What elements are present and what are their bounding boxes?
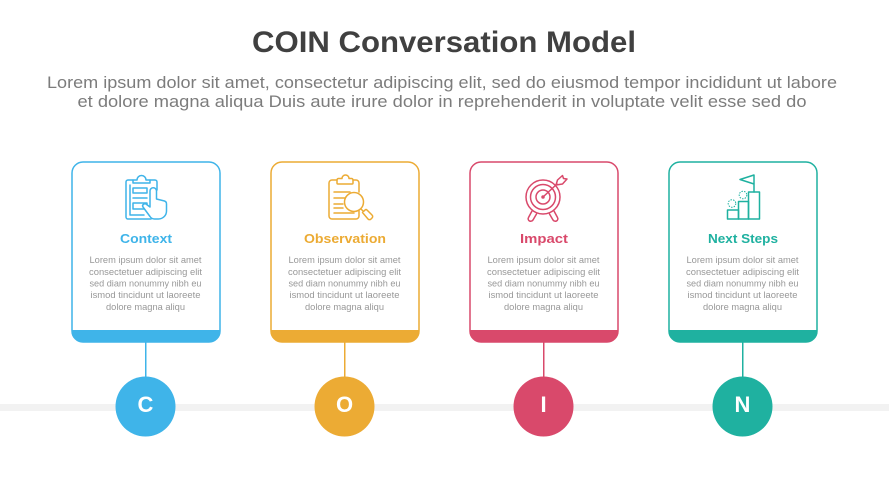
- heading: next steps: Next Steps: [708, 231, 778, 246]
- text block: observation: [288, 254, 401, 312]
- text block: context: [89, 254, 202, 312]
- text block: observation: sed diam nonummy nibh eu: [288, 278, 400, 288]
- text block: next steps: [686, 254, 799, 312]
- marker: I: [514, 342, 574, 436]
- text block: next steps: dolore magna aliqu: [703, 301, 782, 312]
- subtitle: et dolore magna aliqua Duis aute irure dolor in reprehenderit in voluptate velit esse sed do: [78, 92, 806, 111]
- marker: O: O: [336, 392, 353, 417]
- subtitle: Lorem ipsum dolor sit amet, consectetur adipiscing elit, sed do eiusmod tempor incididunt ut labore: [47, 73, 837, 92]
- icon: clipboard with hand: [126, 176, 167, 219]
- text block: observation: dolore magna aliqu: [305, 301, 384, 312]
- panel: next steps: [668, 162, 818, 342]
- icon: target with arrow: [526, 176, 567, 221]
- icon: clipboard with magnifier: [329, 175, 373, 220]
- text block: impact: ismod tincidunt ut laoreete: [488, 289, 598, 300]
- marker: C: [116, 342, 176, 436]
- marker: N: N: [735, 392, 750, 417]
- panel: impact: [470, 162, 619, 342]
- icon: steps with flag: [728, 175, 760, 219]
- text block: impact: dolore magna aliqu: [504, 301, 583, 312]
- text block: context: dolore magna aliqu: [106, 301, 185, 312]
- marker: I: I: [540, 392, 547, 417]
- panel: observation: [270, 162, 420, 342]
- text block: next steps: consectetuer adipiscing elit: [686, 266, 799, 277]
- heading: impact: Impact: [520, 231, 569, 246]
- text block: impact: Lorem ipsum dolor sit amet: [488, 254, 600, 265]
- heading: context: Context: [120, 231, 173, 246]
- panel: context: [72, 162, 221, 342]
- text block: observation: consectetuer adipiscing elit: [288, 266, 401, 277]
- text block: context: ismod tincidunt ut laoreete: [90, 289, 200, 300]
- text block: impact: consectetuer adipiscing elit: [487, 266, 600, 277]
- text block: impact: sed diam nonummy nibh eu: [488, 278, 600, 288]
- heading: observation: Observation: [304, 231, 386, 246]
- text block: context: Lorem ipsum dolor sit amet: [90, 254, 202, 265]
- text block: next steps: Lorem ipsum dolor sit amet: [686, 254, 799, 265]
- text block: context: consectetuer adipiscing elit: [89, 266, 202, 277]
- marker: O: [314, 342, 374, 436]
- subtitle: [47, 73, 837, 111]
- text block: next steps: sed diam nonummy nibh eu: [686, 278, 798, 288]
- title: COIN Conversation Model: [252, 26, 636, 59]
- text block: next steps: ismod tincidunt ut laoreete: [688, 289, 798, 300]
- text block: impact: [487, 254, 600, 312]
- timeline track: [0, 404, 889, 411]
- text block: observation: Lorem ipsum dolor sit amet: [288, 254, 401, 265]
- text block: observation: ismod tincidunt ut laoreete: [290, 289, 400, 300]
- text block: context: sed diam nonummy nibh eu: [90, 278, 202, 288]
- marker: N: [712, 342, 772, 436]
- marker: C: C: [138, 392, 154, 417]
